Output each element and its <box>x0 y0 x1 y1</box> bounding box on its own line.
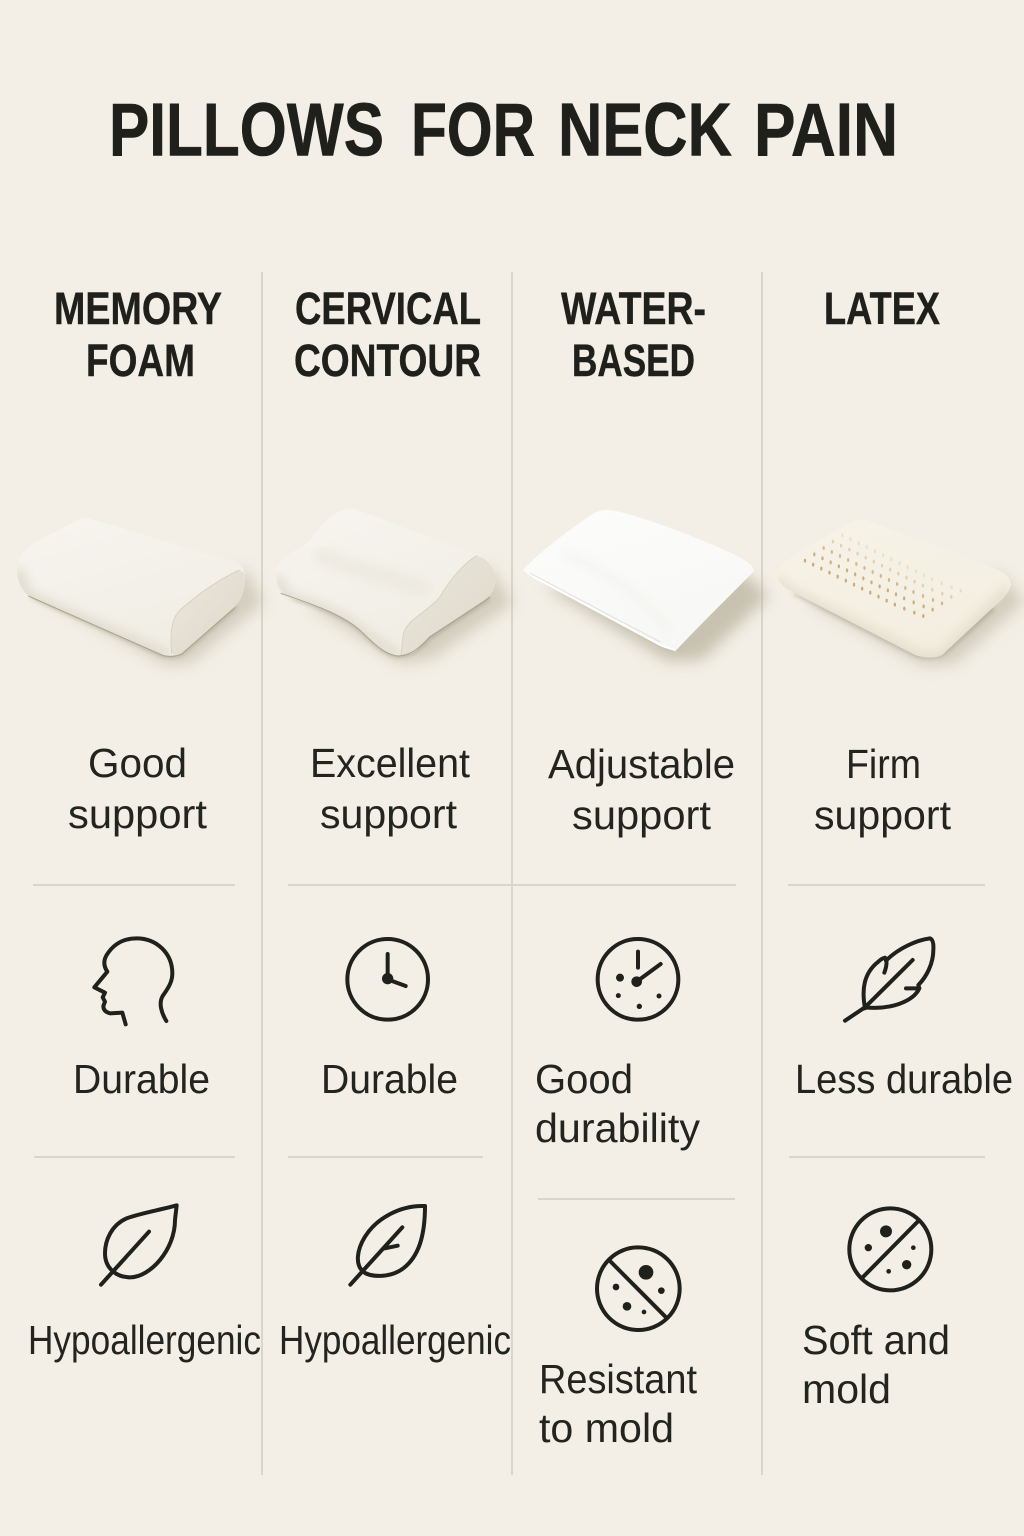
panel: latex <box>778 283 1024 1412</box>
title: PAIN <box>754 88 898 172</box>
panel: water-based <box>523 283 769 1451</box>
allergy: soft and mold <box>802 1317 950 1412</box>
support: good support <box>68 740 208 837</box>
icon: leaf with branch <box>350 1206 425 1285</box>
support: excellent support: Excellent <box>310 740 471 786</box>
support: good support: support <box>68 791 208 837</box>
allergy: resistant to mold <box>539 1356 698 1451</box>
support: firm support <box>814 741 952 838</box>
heading: memory foam: MEMORY <box>54 283 222 334</box>
icon: dial clock <box>598 939 678 1020</box>
heading: cervical contour <box>294 283 481 386</box>
allergy: hypoallergenic: Hypoallergenic <box>279 1317 511 1363</box>
heading: memory foam: FOAM <box>86 335 195 386</box>
title: NECK <box>558 88 732 172</box>
support: excellent support: support <box>320 791 458 837</box>
image: cervical contour pillow <box>276 555 515 668</box>
allergy: soft and mold: mold <box>802 1366 891 1412</box>
heading: cervical contour: CERVICAL <box>295 283 481 334</box>
icon: clock <box>347 939 428 1020</box>
icon: leaf <box>101 1205 177 1285</box>
heading: water-based <box>561 283 706 386</box>
heading: cervical contour: CONTOUR <box>294 335 481 386</box>
allergy: hypoallergenic: Hypoallergenic <box>28 1317 261 1363</box>
durability: good durability: Good <box>535 1056 633 1102</box>
panel: memory foam <box>17 283 263 1363</box>
panel: cervical contour <box>276 283 513 1363</box>
title <box>109 88 898 172</box>
icon: feather <box>845 938 933 1021</box>
heading: water-based: BASED <box>572 335 695 386</box>
title: FOR <box>411 88 535 172</box>
icon: head profile <box>94 938 172 1024</box>
support: firm support: support <box>814 792 952 838</box>
allergy: soft and mold: Soft and <box>802 1317 950 1363</box>
support: excellent support <box>310 740 471 837</box>
durability: good durability: durability <box>535 1105 700 1151</box>
allergy: resistant to mold: Resistant <box>539 1356 698 1402</box>
support: adjustable support: support <box>572 792 712 838</box>
image: latex pillow <box>778 519 1024 667</box>
support: adjustable support <box>548 741 735 838</box>
durability: durable: Durable <box>73 1056 210 1102</box>
durability: durable: Durable <box>321 1056 458 1102</box>
durability: less durable: Less durable <box>795 1056 1013 1102</box>
heading: water-based: WATER- <box>561 283 706 334</box>
image: water-based pillow <box>523 510 769 662</box>
title: PILLOWS <box>109 88 384 172</box>
heading: latex: LATEX <box>824 283 940 334</box>
allergy: resistant to mold: to mold <box>539 1405 674 1451</box>
support: adjustable support: Adjustable <box>548 741 735 787</box>
image: memory foam pillow <box>17 566 266 670</box>
heading: memory foam <box>54 283 222 386</box>
durability: good durability <box>535 1056 700 1151</box>
icon: no mold slashed <box>849 1208 931 1290</box>
support: good support: Good <box>88 740 187 786</box>
icon: no mold <box>597 1247 680 1330</box>
support: firm support: Firm <box>846 741 921 787</box>
